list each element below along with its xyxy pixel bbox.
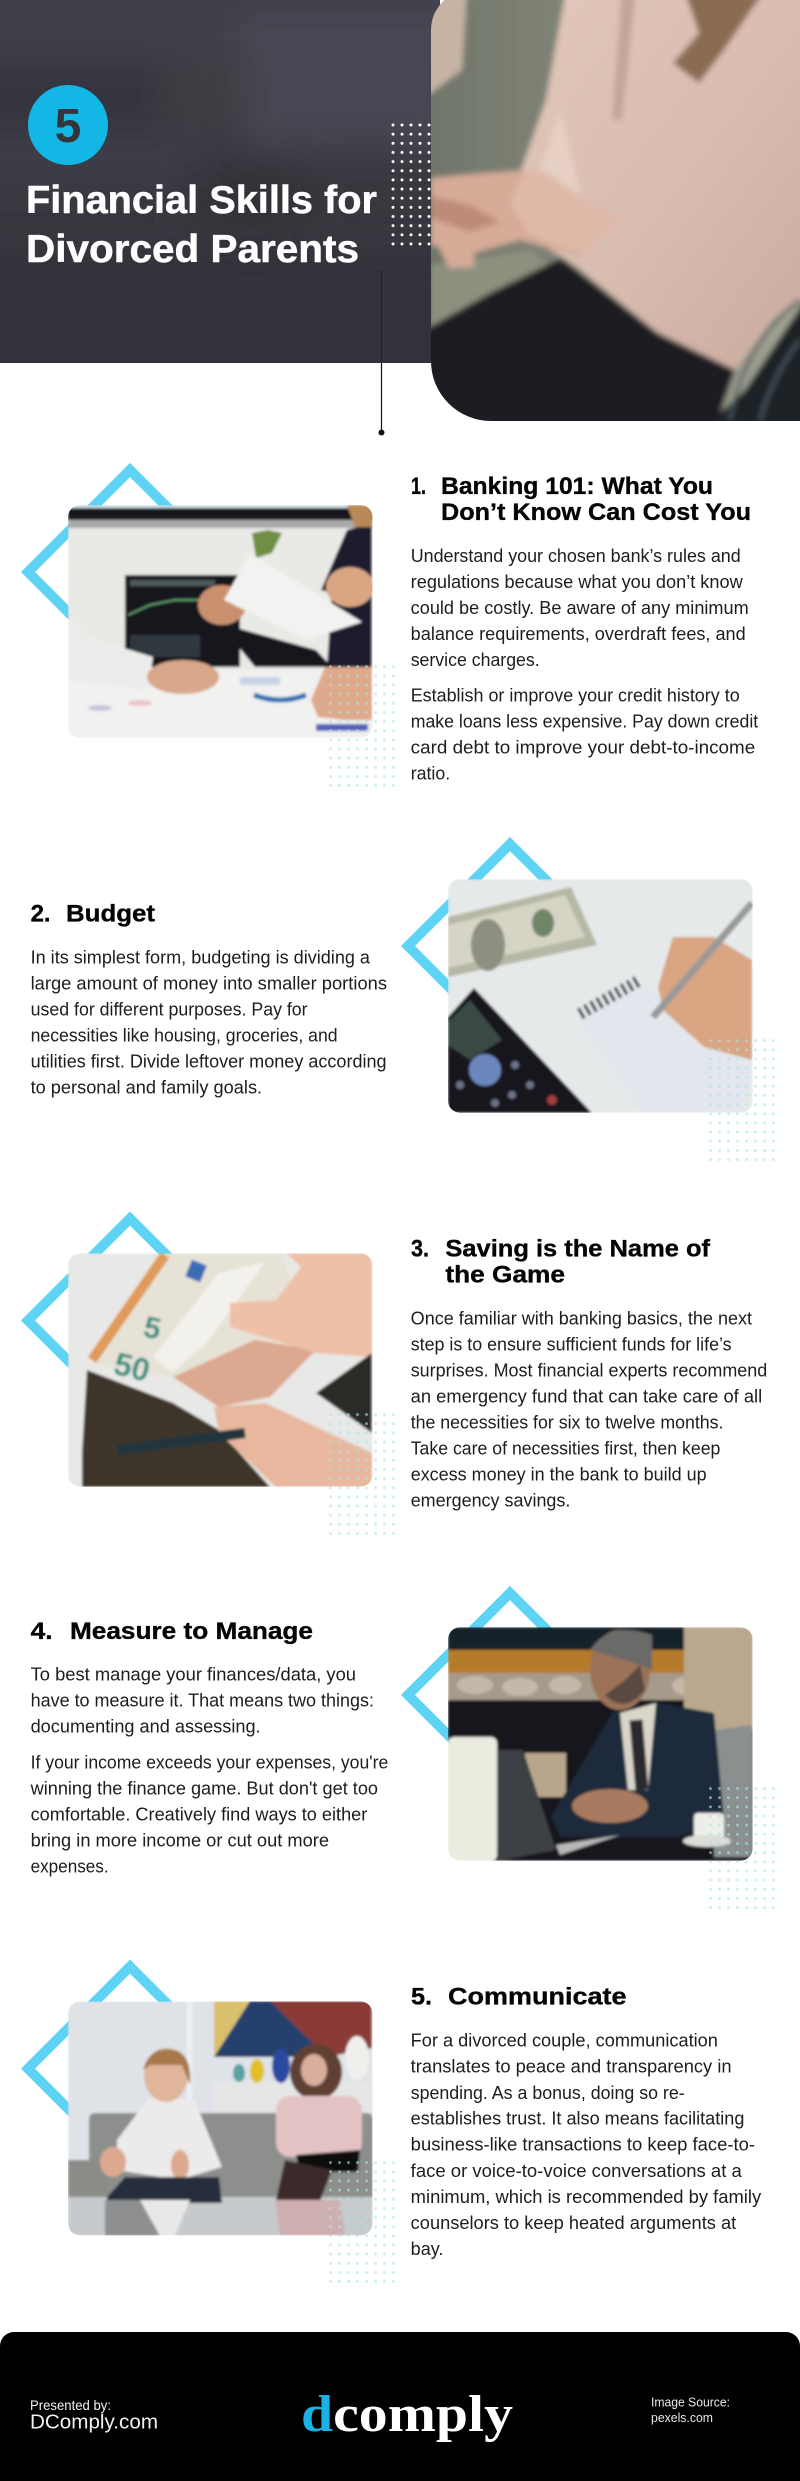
section 2: budget <box>31 844 778 1164</box>
section 5: communicate <box>28 1967 761 2286</box>
section 1 heading: 1. <box>411 473 426 500</box>
section 5 heading: Communicate <box>448 1984 626 2011</box>
section 1 body text: Understand your chosen bank’s rules and <box>411 546 741 566</box>
title: Financial Skills for <box>26 179 377 222</box>
section 2 body text: to personal and family goals. <box>31 1077 262 1097</box>
section 4 body text: winning the finance game. But don't get too <box>30 1778 378 1798</box>
title: Divorced Parents <box>26 228 359 271</box>
section 3 body text: excess money in the bank to build up <box>411 1464 707 1484</box>
section 2 body text: used for different purposes. Pay for <box>31 999 308 1019</box>
image source: pexels.com <box>651 2410 713 2425</box>
section 5 dots <box>326 2158 398 2286</box>
image source: Image Source: <box>651 2395 730 2410</box>
section 1 heading: Don’t Know Can Cost You <box>441 499 751 526</box>
section 4 photo: businessman with laptop <box>448 1627 753 1861</box>
section 3 body text: the necessities for six to twelve months. <box>411 1412 724 1432</box>
section 2 diamond <box>408 844 612 1048</box>
section 3 dots <box>326 1410 398 1538</box>
section 3: saving <box>28 1218 767 1538</box>
section 3 body text <box>411 1308 767 1510</box>
header background <box>0 0 440 363</box>
section 1 body text: could be costly. Be aware of any minimum <box>411 598 749 618</box>
section 5 photo: couple on sofa <box>68 2001 373 2236</box>
section 3 body text: step is to ensure sufficient funds for life’s <box>411 1334 732 1354</box>
section 3 heading: Saving is the Name of <box>445 1236 711 1263</box>
section 1 body text: regulations because what you don’t know <box>411 572 744 592</box>
section 4 body text: comfortable. Creatively find ways to either <box>31 1804 367 1824</box>
section 2 heading: Budget <box>66 901 155 928</box>
section 5 body text: For a divorced couple, communication <box>411 2031 718 2051</box>
presented by <box>30 2397 158 2434</box>
section 2 body text: utilities first. Divide leftover money according <box>31 1051 387 1071</box>
section 3 heading <box>411 1236 711 1289</box>
section 1 body text <box>411 546 758 784</box>
footer background <box>0 2332 800 2481</box>
section 3 body text: Take care of necessities first, then keep <box>411 1438 720 1458</box>
section 4 dots <box>706 1784 778 1912</box>
section 4 body text: To best manage your finances/data, you <box>31 1664 356 1684</box>
header photo: woman removing ring <box>421 0 800 431</box>
logo: dcomply: dcomply <box>301 2386 513 2443</box>
section 4: measure <box>30 1593 778 1912</box>
header dot pattern <box>388 120 432 249</box>
section 4 body text: bring in more income or cut out more <box>31 1830 329 1850</box>
section 2 heading <box>31 901 155 928</box>
section 4 heading: 4. <box>31 1618 53 1645</box>
section 1 body text: balance requirements, overdraft fees, and <box>411 624 746 644</box>
section 1 heading <box>411 473 751 526</box>
section 4 body text: If your income exceeds your expenses, you're <box>31 1752 388 1772</box>
section 3 heading: 3. <box>411 1236 429 1263</box>
badge: number 5 <box>28 85 108 165</box>
section 5 body text: business-like transactions to keep face-to- <box>411 2135 755 2155</box>
section 2 body text <box>31 947 387 1097</box>
section 1 body text: card debt to improve your debt-to-income <box>411 738 755 758</box>
section 1 body text: Establish or improve your credit history to <box>411 686 740 706</box>
section 1 body text: ratio. <box>411 764 450 784</box>
badge: number 5: 5 <box>55 100 81 153</box>
section 2 dots <box>706 1036 778 1164</box>
title <box>26 179 377 271</box>
section 4 body text: documenting and assessing. <box>31 1716 261 1736</box>
section 4 diamond <box>408 1593 612 1797</box>
section 1 photo: office meeting <box>68 505 374 738</box>
section 2 heading: 2. <box>31 901 51 928</box>
section 5 diamond <box>28 1967 232 2171</box>
section 1 body text: service charges. <box>411 650 540 670</box>
section 5 body text: counselors to keep heated arguments at <box>411 2213 736 2233</box>
section 2 photo: cash, calculator, notebook <box>448 879 753 1113</box>
section 4 heading: Measure to Manage <box>70 1618 313 1645</box>
section 4 body text: have to measure it. That means two things: <box>31 1690 374 1710</box>
section 4 body text: expenses. <box>31 1856 109 1876</box>
section 5 body text: spending. As a bonus, doing so re- <box>411 2083 685 2103</box>
vertical connector line with end dot <box>378 270 384 436</box>
section 3 heading: the Game <box>445 1262 565 1289</box>
section 5 body text: minimum, which is recommended by family <box>411 2187 761 2207</box>
section 5 body text: translates to peace and transparency in <box>411 2057 732 2077</box>
section 2 body text: In its simplest form, budgeting is dividing a <box>31 947 371 967</box>
presented by: Presented by: <box>30 2397 111 2413</box>
section 1 body text: make loans less expensive. Pay down credit <box>411 712 758 732</box>
section 3 body text: Once familiar with banking basics, the next <box>411 1308 752 1328</box>
section 5 body text: face or voice-to-voice conversations at a <box>411 2161 743 2181</box>
section 3 photo: euros and wallet: 50 <box>110 1345 154 1389</box>
section 3 body text: surprises. Most financial experts recommend <box>411 1360 767 1380</box>
section 2 body text: necessities like housing, groceries, and <box>31 1025 338 1045</box>
section 1 dots <box>326 662 398 790</box>
section 1 diamond <box>28 470 232 674</box>
section 5 body text: bay. <box>411 2239 443 2259</box>
footer <box>0 2332 800 2481</box>
section 1: banking <box>28 470 758 790</box>
section 5 body text: establishes trust. It also means facilitating <box>411 2109 744 2129</box>
section 2 body text: large amount of money into smaller portions <box>31 973 387 993</box>
section 3 body text: an emergency fund that can take care of all <box>411 1386 762 1406</box>
image source <box>651 2395 730 2425</box>
section 3 photo: euros and wallet <box>68 1253 373 1487</box>
presented by: DComply.com <box>30 2412 158 2434</box>
section 4 body text <box>30 1664 388 1876</box>
section 3 photo: euros and wallet: 5 <box>141 1311 164 1346</box>
section 3 diamond <box>28 1218 232 1422</box>
section 3 body text: emergency savings. <box>411 1490 570 1510</box>
section 1 heading: Banking 101: What You <box>441 473 713 500</box>
section 5 body text <box>411 2031 761 2259</box>
section 5 heading: 5. <box>411 1984 432 2011</box>
